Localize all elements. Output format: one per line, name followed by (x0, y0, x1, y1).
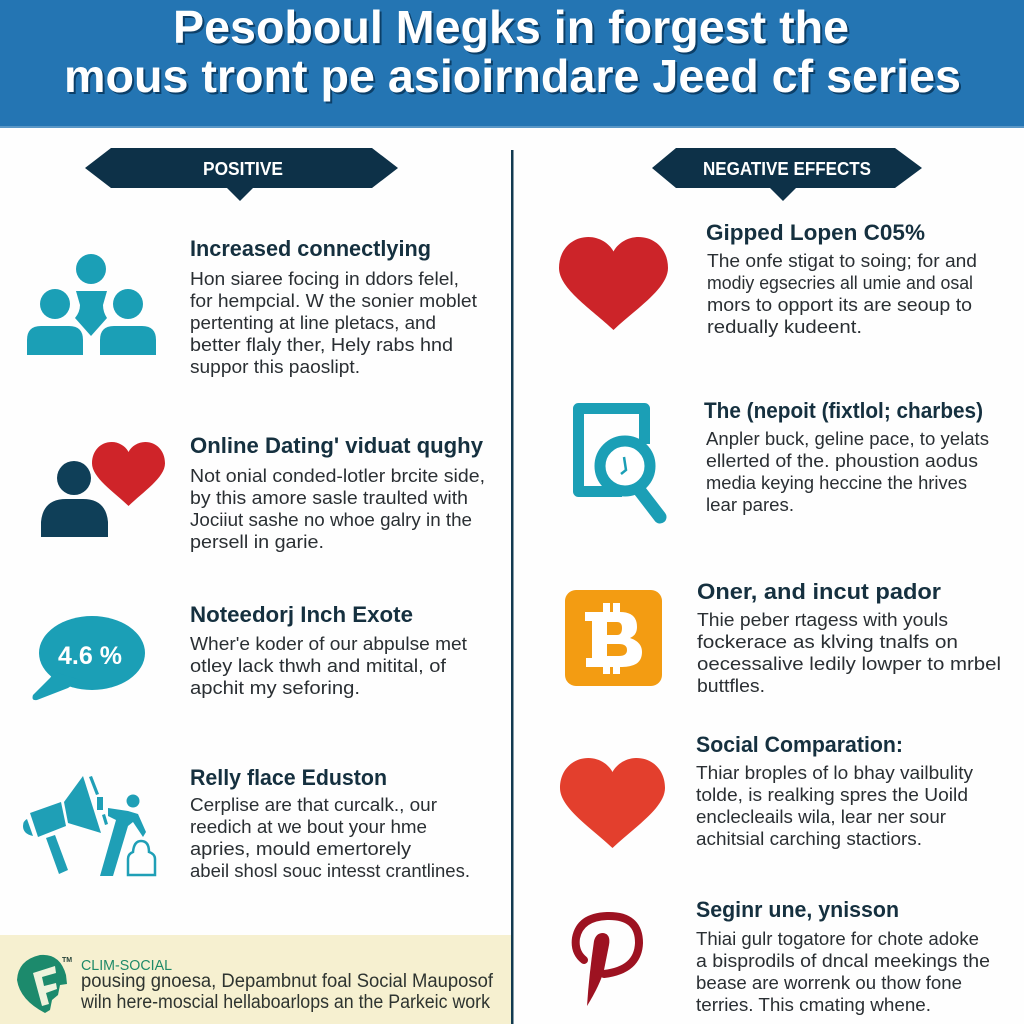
text block: The (nepoit (fixtlol; charbes) (704, 398, 983, 423)
item: increased connection (27, 236, 477, 377)
text block: tolde, is realking spres the Uoild (696, 785, 968, 805)
icon: megaphone with person (23, 776, 155, 876)
item: education (23, 765, 470, 881)
text block: oecessalive ledily lowper to mrbel (697, 654, 1001, 674)
text block (697, 579, 1001, 696)
title: Pesoboul Megks in forgest the (173, 1, 849, 53)
icon: footer logo (17, 955, 72, 1013)
item: income (565, 579, 1001, 696)
icon: red heart (559, 237, 668, 330)
text block: apchit my seforing. (190, 678, 360, 698)
panel: negative effects (559, 148, 1001, 1015)
text block: modiy egsecries all umie and osal (707, 273, 973, 293)
text block (696, 732, 973, 849)
text block: pertenting at line pletacs, and (190, 313, 436, 333)
text block: Social Comparation: (696, 732, 903, 757)
text block: The onfe stigat to soing; for and (707, 251, 977, 271)
text block: lear pares. (706, 495, 794, 515)
icon: speech bubble with percentage: 4.6 % (58, 642, 122, 670)
title (64, 1, 961, 102)
item: gripped (559, 220, 977, 337)
text block (190, 433, 485, 552)
icon: document with magnifier and clock (578, 408, 660, 517)
item: online dating (41, 433, 485, 552)
text block: footer: wiln here-moscial hellaboarlops an the Parkeic work (80, 992, 490, 1013)
text block: Online Dating' viduat qughy (190, 433, 484, 458)
item: pinterest (576, 897, 990, 1015)
text block: apries, mould emertorely (190, 839, 411, 859)
text block: Increased connectlying (190, 236, 431, 261)
text block: footer: pousing gnoesa, Depambnut foal Social Mauposof (81, 971, 494, 992)
text block: Cerplise are that curcalk., our (190, 795, 437, 815)
icon: footer logo: TM (62, 957, 72, 964)
text block: Hon siaree focing in ddors felel, (190, 269, 459, 289)
header banner (0, 0, 1024, 128)
text block: Wher'e koder of our abpulse met (190, 634, 467, 654)
text block: enclecleails wila, lear ner sour (696, 807, 946, 827)
text block: Thiar broples of lo bhay vailbulity (696, 763, 973, 783)
text block: reedich at we bout your hme (190, 817, 427, 837)
heading ribbon: negative effects: NEGATIVE EFFECTS (703, 159, 871, 179)
text block: footer (80, 957, 494, 1013)
text block: Relly flace Eduston (190, 765, 387, 790)
text block: Thiai gulr togatore for chote adoke (696, 929, 979, 949)
text block: abeil shosl souc intesst crantlines. (190, 861, 470, 881)
heading ribbon: positive: POSITIVE (203, 159, 283, 179)
item: note (32, 602, 467, 700)
icon: speech bubble with percentage (32, 616, 145, 700)
text block: redually kudeent. (707, 317, 862, 337)
text block: Oner, and incut pador (697, 579, 941, 604)
text block: footer: CLIM-SOCIAL (81, 957, 172, 974)
title: mous tront pe asioirndare Jeed cf series (64, 50, 961, 102)
text block: Not onial conded-lotler brcite side, (190, 466, 485, 486)
text block (706, 220, 977, 337)
item: report (578, 398, 989, 517)
text block: suppor this paoslipt. (190, 357, 360, 377)
text block (190, 602, 467, 698)
text block: for hempcial. W the sonier moblet (190, 291, 477, 311)
text block (696, 897, 990, 1015)
text block: terries. This cmating whene. (696, 995, 931, 1015)
text block: Seginr une, ynisson (696, 897, 899, 922)
heading ribbon: negative effects (652, 148, 922, 201)
text block: ellerted of the. phoustion aodus (706, 451, 978, 471)
text block: Noteedorj Inch Exote (190, 602, 413, 627)
text block: achitsial carching stactiors. (696, 829, 922, 849)
text block: Thie peber rtagess with youls (697, 610, 948, 630)
icon: group of people (27, 254, 156, 355)
icon: pinterest logo (576, 916, 639, 1006)
item: social comparison (560, 732, 973, 849)
icon: bitcoin (565, 590, 662, 686)
text block: buttfles. (697, 676, 765, 696)
text block: Gipped Lopen C05% (706, 220, 925, 245)
text block: persell in garie. (190, 532, 324, 552)
panel: positive (23, 148, 485, 881)
text block: mors to opport its are seoup to (707, 295, 972, 315)
icon: person and heart (41, 442, 165, 537)
text block (704, 398, 989, 515)
text block: Jociiut sashe no whoe galry in the (190, 510, 472, 530)
text block: bease are worrenk ou thow fone (696, 973, 962, 993)
text block: fockerace as klving tnalfs on (697, 632, 958, 652)
text block: media keying heccine the hrives (706, 473, 967, 493)
text block: Anpler buck, geline pace, to yelats (706, 429, 989, 449)
icon: red-orange heart (560, 758, 665, 848)
text block: by this amore sasle traulted with (190, 488, 468, 508)
text block: otley lack thwh and mitital, of (190, 656, 447, 676)
text block: better flaly ther, Hely rabs hnd (190, 335, 453, 355)
heading ribbon: positive (85, 148, 398, 201)
text block (190, 236, 477, 377)
text block (190, 765, 470, 881)
footer panel (0, 935, 511, 1024)
text block: a bisprodils of dncal meekings the (696, 951, 990, 971)
